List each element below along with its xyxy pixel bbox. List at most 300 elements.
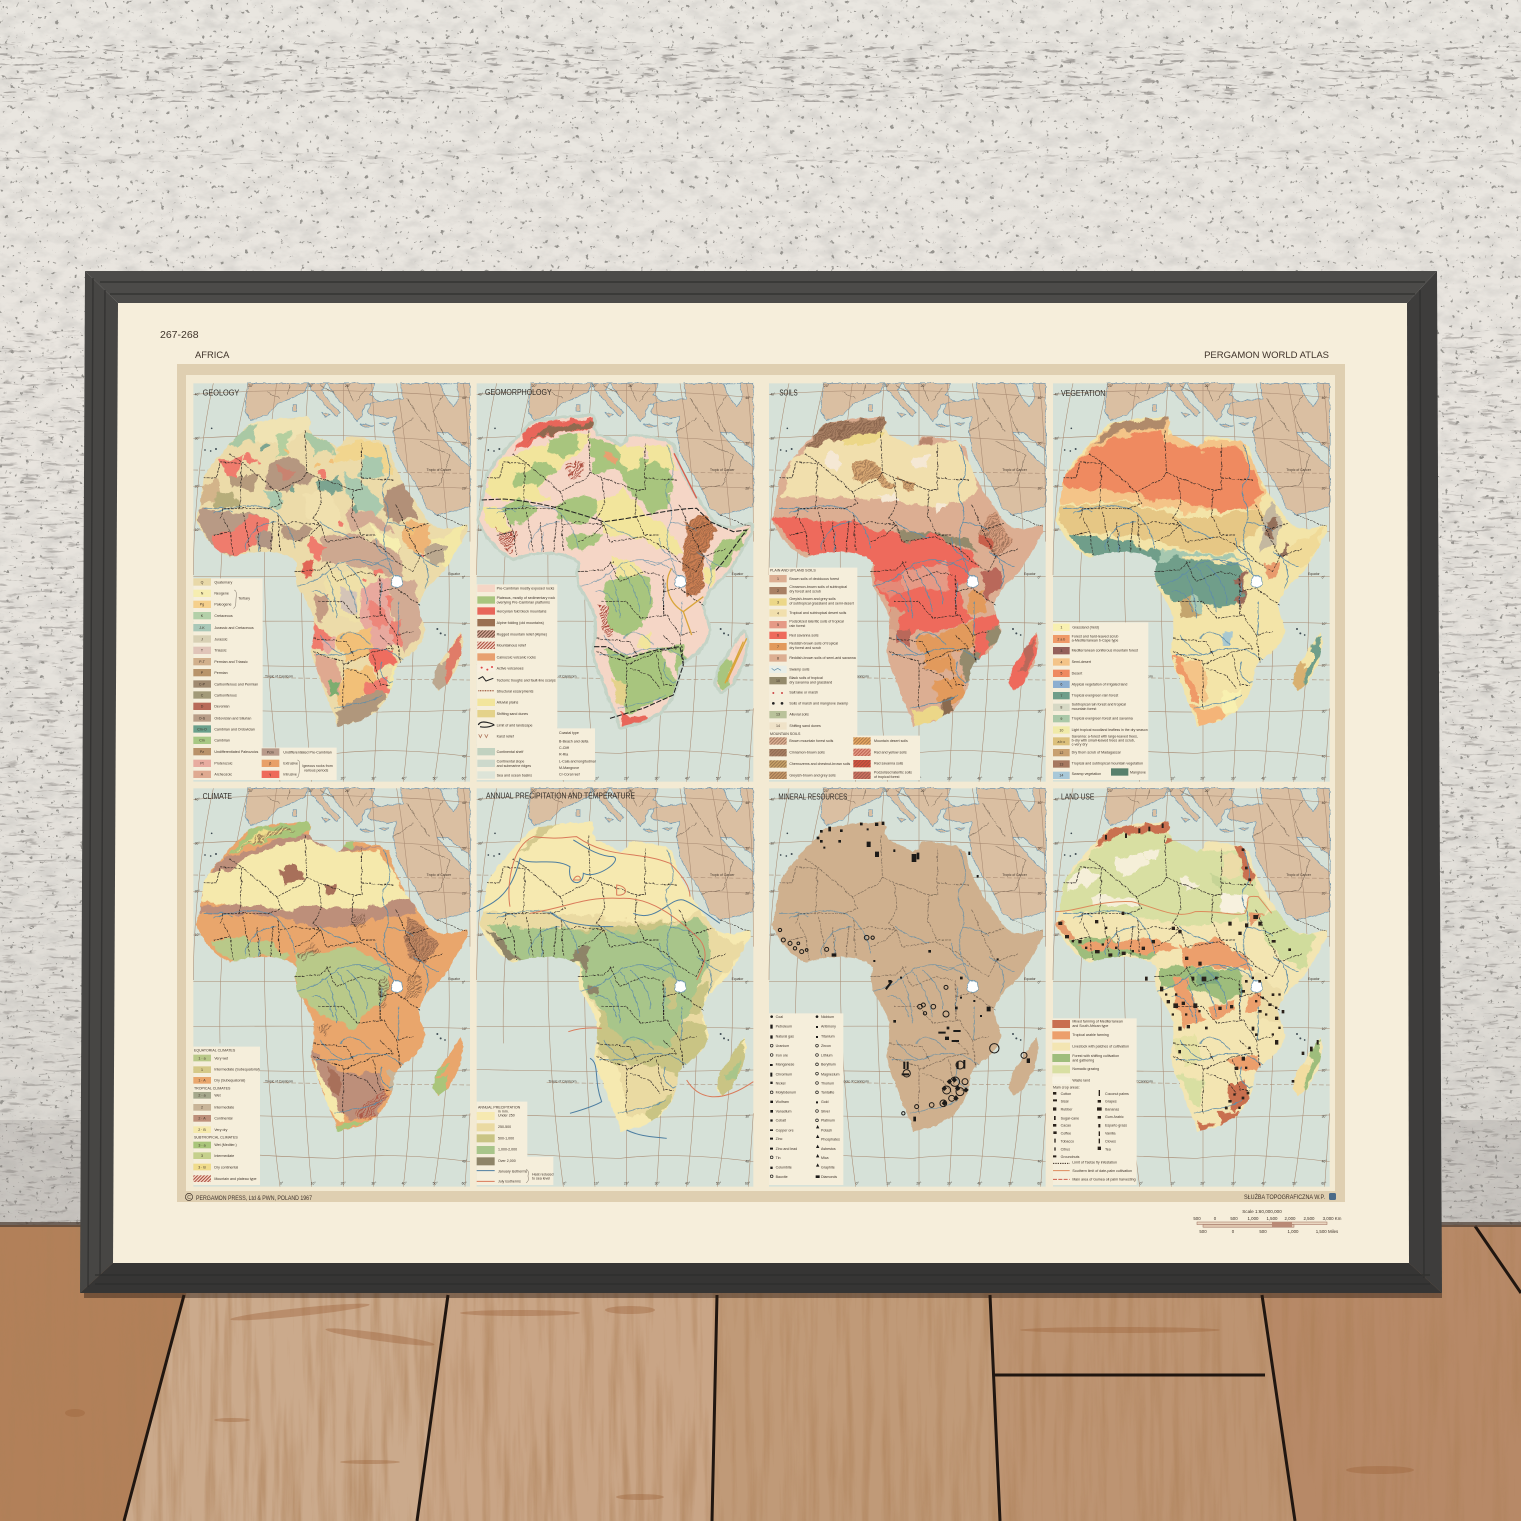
legend: vegetation: a b c	[1057, 740, 1065, 744]
legend: soils: Black soils of tropical	[789, 676, 823, 680]
scale bar: 500	[1199, 1229, 1207, 1234]
Africa soil regions	[772, 416, 1044, 727]
legend: soils: Red savanna soils	[874, 761, 903, 765]
legend: geology: D	[201, 705, 204, 709]
legend: vegetation: 5	[1060, 672, 1062, 676]
legend: geomorphology: Rugged mountain relief (Alpine)	[497, 632, 547, 636]
legend: climate: 1 · A	[198, 1079, 206, 1083]
map sheet: paper	[186, 375, 1335, 1191]
legend: climate	[193, 1047, 260, 1185]
legend: soils: 4	[777, 611, 779, 615]
legend: land use: Gum Arabic	[1105, 1115, 1124, 1119]
legend: vegetation	[1053, 622, 1148, 780]
legend: geology: Igneous rocks from	[302, 764, 333, 768]
legend: mineral resources: Vanadium	[776, 1109, 792, 1113]
legend: soils: dry forest and scrub	[789, 646, 821, 650]
legend: annual precipitation: Under 250	[498, 1114, 515, 1118]
legend: mineral resources: Zinc and lead	[776, 1147, 797, 1151]
legend: geomorphology: Hercynian fold block mountains	[497, 609, 547, 613]
scale bar: 500	[1230, 1216, 1238, 1221]
legend: soils: 3	[777, 600, 779, 604]
legend: vegetation: Light tropical woodland leafless in the dry season	[1072, 728, 1148, 732]
legend: geomorphology: L-Cala and longitudinal	[559, 759, 596, 763]
legend: soils: dry savanna and grassland	[789, 681, 832, 685]
legend: land use: Cloves	[1105, 1140, 1116, 1144]
legend: soils: 6	[777, 634, 779, 638]
heading: Africa: AFRICA	[195, 349, 230, 360]
legend: land use: Tropical arable farming	[1072, 1033, 1109, 1037]
legend: mineral resources: Nickel	[776, 1081, 786, 1085]
legend: soils: Cinnamon-brown soils	[789, 750, 825, 754]
legend: mineral resources: Manganese	[776, 1063, 794, 1067]
legend: soils: dry forest and scrub	[789, 590, 821, 594]
legend: annual precipitation	[477, 1102, 553, 1185]
legend: geology: T	[201, 649, 204, 653]
legend: geology: Pz	[200, 750, 204, 754]
legend: land use: Sisal	[1061, 1100, 1069, 1104]
legend: land use	[1052, 1018, 1137, 1185]
continental shelf shading	[479, 416, 751, 727]
scale bar: 1,000	[1288, 1229, 1299, 1234]
scale bar: 0	[1232, 1229, 1235, 1234]
legend: geomorphology: Active volcanoes	[497, 666, 524, 670]
scale bar: 500	[1193, 1216, 1201, 1221]
legend: geology: J	[201, 637, 203, 641]
legend: land use: Forest with shifting cultivation	[1072, 1054, 1119, 1058]
legend: land use: Cacao	[1061, 1124, 1071, 1128]
legend: mineral resources: Silver	[821, 1109, 831, 1113]
legend: geomorphology: M-Mangrove	[559, 766, 579, 770]
legend: annual precipitation: in mm.	[498, 1109, 509, 1113]
legend: mineral resources: Thorium	[821, 1081, 834, 1085]
legend: geology: Cambrian	[214, 739, 230, 743]
legend: geology: Pcm	[267, 750, 274, 754]
legend: climate: 1 · a	[198, 1056, 206, 1060]
Africa land-use regions	[1056, 821, 1328, 1132]
panel title: CLIMATE	[203, 792, 232, 801]
legend: geomorphology: Tectonic troughs and fault-line scarps	[497, 678, 556, 682]
legend: mineral resources: Zircon	[821, 1044, 831, 1048]
legend: vegetation: 2 a b	[1057, 638, 1065, 642]
legend: geology: C	[201, 693, 204, 697]
legend: climate: Wet (Mediter.)	[214, 1143, 237, 1147]
legend: climate: Mountain and plateau type	[214, 1177, 257, 1181]
legend: vegetation: Tropical and subtropical mountain vegetation	[1072, 762, 1143, 766]
legend: soils: 8	[777, 656, 779, 660]
wooden floor	[0, 1222, 1521, 1521]
legend: vegetation: b-dry with small-leaved trees and scrub,	[1072, 738, 1135, 742]
legend: climate: 2 · a	[198, 1094, 206, 1098]
date-palm limit line	[1055, 896, 1272, 914]
legend: climate: Intermediate	[214, 1154, 234, 1158]
map panel: geomorphology	[470, 383, 760, 782]
legend: soils: 13	[776, 713, 780, 717]
crop symbols	[1058, 823, 1319, 1109]
legend: land use: Main area of Guinea oil palm harvesting	[1072, 1178, 1136, 1182]
legend: vegetation: 9	[1060, 717, 1062, 721]
legend: land use: Rubber	[1061, 1107, 1073, 1111]
legend: soils: Cinnamon-brown soils of subtropical	[789, 585, 847, 589]
legend: geomorphology: Coastal type	[559, 731, 579, 735]
map panel: soils	[760, 383, 1050, 782]
legend: climate: Dry continental	[214, 1165, 238, 1169]
legend: land use: Waste land	[1072, 1078, 1090, 1082]
legend: vegetation: Desert	[1072, 671, 1082, 675]
legend: land use: Groundnuts	[1061, 1155, 1080, 1159]
legend: geology: N	[201, 592, 204, 596]
legend: soils: Red and yellow soils	[874, 750, 907, 754]
legend: soils: Alluvial soils	[789, 713, 809, 717]
legend: soils: 7	[777, 645, 779, 649]
legend: mineral resources: Natural gas	[776, 1035, 794, 1039]
legend: soils: 10	[776, 679, 780, 683]
legend: mineral resources: Cobalt	[776, 1119, 786, 1123]
legend: soils: Greyish-brown and grey soils	[789, 597, 836, 601]
legend: land use: Main crop areas:	[1053, 1086, 1080, 1090]
map panel: vegetation	[1045, 383, 1335, 782]
legend: vegetation: Savanna: a-forest with large-leaved trees,	[1072, 734, 1138, 738]
legend: land use: Limit of Tsetse fly infestation	[1072, 1160, 1117, 1164]
legend: soils: rain forest	[789, 624, 805, 628]
legend: land use: Mixed farming of Mediterranean	[1072, 1019, 1123, 1023]
picture frame	[80, 271, 1442, 1293]
legend: vegetation: 8	[1060, 706, 1062, 710]
legend: mineral resources: Magnesium	[821, 1072, 840, 1076]
legend: climate: 3 · a	[198, 1143, 206, 1147]
legend: geology: O-S	[199, 716, 206, 720]
legend: vegetation: Mangrove	[1130, 771, 1146, 775]
legend: land use: Sugar-cane	[1061, 1116, 1079, 1120]
legend: vegetation: 10	[1059, 728, 1063, 732]
legend: mineral resources: Platinum	[821, 1119, 835, 1123]
legend: mineral resources: Niobium	[821, 1015, 834, 1019]
legend: geomorphology: and submarine ridges	[497, 764, 531, 768]
copyright line: PERGAMON PRESS, Ltd & PWN, POLAND 1967	[196, 1195, 312, 1202]
legend: geomorphology: Shifting sand dunes	[497, 712, 528, 716]
legend: vegetation: 3	[1060, 649, 1062, 653]
legend: mineral resources: Petroleum	[776, 1025, 792, 1029]
legend: land use: Coffee	[1061, 1131, 1071, 1135]
legend: soils: MOUNTAIN SOILS	[770, 732, 801, 736]
legend: geology: A	[201, 773, 204, 777]
legend: vegetation: Grassland (Veld)	[1072, 626, 1099, 630]
legend: vegetation: a-Mediterranean b-Cape type	[1072, 639, 1118, 643]
scale bar: 500	[1259, 1229, 1267, 1234]
map panel: mineral resources	[760, 788, 1050, 1187]
panel title: GEOMORPHOLOGY	[485, 388, 552, 397]
Africa precipitation regions	[479, 821, 751, 1132]
legend: land use: Coconut palms	[1105, 1092, 1129, 1096]
legend: climate: 2 · B	[198, 1128, 206, 1132]
legend: climate: 2	[201, 1106, 203, 1110]
legend: geology: Proterozoic	[214, 762, 233, 766]
legend: geology: Undifferentiated Pre-Cambrian	[283, 750, 332, 754]
page number: 267-268	[160, 329, 199, 341]
legend: vegetation: Atypical vegetation of irrigated land	[1072, 682, 1127, 686]
legend: geology: Quaternary	[214, 580, 232, 584]
legend: soils: Podzolized lateritic soils of tropical	[789, 619, 844, 623]
legend: land use: Nomadic grazing	[1072, 1067, 1099, 1071]
legend: soils: Red savanna soils	[789, 634, 819, 638]
scale bar: 1,000	[1248, 1216, 1259, 1221]
legend: annual precipitation: Over 2,000	[498, 1159, 516, 1163]
legend: mineral resources: Phosphates	[821, 1138, 840, 1142]
legend: geomorphology: Plateaus, mostly of sedimentary rock	[497, 596, 555, 600]
legend: geomorphology: B-Beach and delta	[559, 739, 588, 743]
legend: geology: γ	[269, 773, 271, 777]
legend: geology: Ordovician and Silurian	[214, 716, 251, 720]
legend: geology: Tertiary	[238, 597, 250, 601]
legend: mineral resources: Gold	[821, 1100, 829, 1104]
legend: mineral resources: Coal	[776, 1015, 783, 1019]
scale bar	[1193, 1209, 1342, 1234]
scale bar: Scale 1:60,000,000	[1242, 1209, 1282, 1214]
legend: soils: of tropical forest	[874, 775, 899, 779]
legend: geology: Neogene	[214, 592, 229, 596]
legend: mineral resources: Titanium	[821, 1035, 835, 1039]
legend: climate: 2 · A	[198, 1117, 206, 1121]
legend: geology: Pg	[200, 603, 204, 607]
legend: geomorphology: Structural escarpments	[497, 689, 534, 693]
legend: climate: Dry (Subequatorial)	[214, 1079, 245, 1083]
map sheet: tan border	[177, 364, 1345, 1202]
legend: geomorphology: Alpine folding (old mountains)	[497, 621, 544, 625]
legend: geology: Carboniferous	[214, 693, 237, 697]
legend: climate: TROPICAL CLIMATES	[194, 1086, 231, 1090]
legend: mineral resources: Lithium	[821, 1053, 833, 1057]
legend: climate: EQUATORIAL CLIMATES	[194, 1049, 236, 1053]
legend: soils: Shifting sand dunes	[789, 724, 821, 728]
legend: climate: Intermediate	[214, 1106, 234, 1110]
legend: mineral resources	[769, 1013, 843, 1185]
mineral deposit symbols	[778, 822, 1030, 1121]
legend: mineral resources: Wolfram	[776, 1100, 789, 1104]
legend: land use: Tea	[1105, 1148, 1111, 1152]
legend: geomorphology: Karst relief	[497, 734, 514, 738]
legend: mineral resources: Uranium	[776, 1044, 789, 1048]
legend: soils: Tropical and subtropical desert soils	[789, 611, 846, 615]
legend: geology: β	[269, 762, 271, 766]
isotherms: July	[509, 837, 753, 1097]
legend: geology: Cambrian and Ordovician	[214, 727, 255, 731]
legend: vegetation: Subtropical rain forest and tropical	[1072, 702, 1126, 706]
legend: soils: PLAIN AND UPLAND SOILS	[770, 569, 816, 573]
legend: geology: Permian	[214, 671, 228, 675]
legend: soils: Reddish-brown soils of semi-arid savanna	[789, 656, 856, 660]
legend: land use: Esparto grass	[1105, 1124, 1127, 1128]
legend: geology: Jurassic	[214, 637, 228, 641]
scale bar: 1,500 Miles	[1316, 1229, 1339, 1234]
legend: geomorphology: Mountainous relief	[497, 644, 526, 648]
legend: soils: Soils of marsh and mangrove swamp	[789, 701, 848, 705]
legend: geomorphology: Alluvial plains	[497, 701, 519, 705]
legend: land use: Vanilla	[1105, 1131, 1115, 1135]
isotherms: January	[477, 840, 720, 1138]
legend: geology: J-K	[199, 626, 205, 630]
legend: geology: P-T	[199, 660, 206, 664]
panel title: LAND USE	[1061, 793, 1094, 802]
legend: mineral resources: Diamonds	[821, 1175, 837, 1179]
legend: land use: Cotton	[1061, 1092, 1071, 1096]
legend: mineral resources: Asbestos	[821, 1147, 836, 1151]
legend: mineral resources: Columbite	[776, 1166, 792, 1170]
legend: geology: Cm	[199, 739, 205, 743]
panel title: VEGETATION	[1061, 389, 1106, 398]
legend: soils: Greyish-brown and grey soils	[789, 773, 836, 777]
legend: geology: C-P	[199, 682, 206, 686]
legend: mineral resources: Copper ore	[776, 1128, 794, 1132]
legend: vegetation: 12	[1059, 751, 1063, 755]
legend: climate: Wet	[214, 1094, 221, 1098]
legend: geology: Undifferentiated Paleozoics	[214, 750, 259, 754]
legend: land use: Grapes	[1105, 1100, 1117, 1104]
legend: geology	[193, 578, 337, 780]
panel title: GEOLOGY	[203, 388, 240, 397]
legend: geomorphology: overlying Pre-Cambrian platforms	[497, 600, 550, 604]
legend: soils: Swamp soils	[789, 667, 810, 671]
panel title: MINERAL RESOURCES	[778, 793, 847, 802]
legend: land use: Citrus	[1061, 1148, 1070, 1152]
legend: annual precipitation: to sea level	[532, 1177, 550, 1181]
legend: mineral resources: Molybdenum	[776, 1091, 796, 1095]
map panel: climate	[187, 788, 477, 1187]
legend: soils: 14	[776, 724, 780, 728]
legend: annual precipitation: Heat reduced	[532, 1172, 553, 1176]
legend: climate: 3 · B	[198, 1165, 206, 1169]
legend: geology: K	[201, 614, 204, 618]
legend: mineral resources: Beryllium	[821, 1063, 836, 1067]
scale bar: 0	[1214, 1216, 1217, 1221]
legend: geology: Permian and Triassic	[214, 660, 248, 664]
legend: annual precipitation: 1,000-2,000	[498, 1148, 517, 1152]
heading: atlas name: PERGAMON WORLD ATLAS	[1204, 350, 1329, 361]
legend: soils: Chernozems and chestnut-brown soils	[789, 762, 850, 766]
legend: soils: Brown mountain forest soils	[789, 739, 833, 743]
legend: mineral resources: Bauxite	[776, 1175, 788, 1179]
legend: vegetation: Dry thorn scrub of Madagascar	[1072, 751, 1122, 755]
legend: climate: 3	[201, 1154, 203, 1158]
legend: land use: Bananas	[1105, 1107, 1119, 1111]
publisher credit: SŁUŻBA TOPOGRAFICZNA W.P.	[1244, 1192, 1325, 1201]
legend: vegetation: 1	[1060, 626, 1062, 630]
legend: mineral resources: Zinc	[776, 1137, 783, 1141]
scale bar: 2,500	[1304, 1216, 1315, 1221]
legend: vegetation: 7	[1060, 694, 1062, 698]
legend: climate: Continental	[214, 1117, 233, 1121]
legend: soils: Brown soils of deciduous forest	[789, 577, 839, 581]
map panel: geology	[187, 383, 477, 782]
legend: mineral resources: Antimony	[821, 1025, 836, 1029]
legend: annual precipitation: July isotherms	[498, 1180, 521, 1184]
copyright line	[185, 1193, 312, 1202]
panel title: SOILS	[779, 388, 798, 397]
legend: geology: various periods	[304, 769, 328, 773]
legend: soils: Podzolized lateritic soils	[874, 770, 912, 774]
legend: soils: 2	[777, 589, 779, 593]
legend: land use: and South African type	[1072, 1024, 1108, 1028]
legend: geology: Paleogene	[214, 603, 231, 607]
legend: soils: Reddish-brown soils of tropical	[789, 641, 838, 645]
legend: climate: Intermediate (Subequatorial)	[214, 1068, 260, 1072]
Africa land fill	[772, 821, 1044, 1132]
legend: land use: Southern limit of date-palm cultivation	[1072, 1169, 1132, 1173]
legend: geology: Archeozoic	[214, 773, 232, 777]
legend: vegetation: Forest and hard-leaved scrub	[1072, 634, 1118, 638]
legend: vegetation: 6	[1060, 683, 1062, 687]
map panel: annual precipitation and temperature	[470, 788, 760, 1187]
legend: geology: Q	[201, 580, 204, 584]
legend: mineral resources: Tantalite	[821, 1091, 834, 1095]
legend: geomorphology: Sea and ocean basins	[497, 773, 532, 777]
legend: geology: Pt	[200, 762, 204, 766]
legend: climate: SUBTROPICAL CLIMATES	[194, 1136, 238, 1140]
legend: climate: 1	[201, 1068, 203, 1072]
legend: geology: Carboniferous and Permian	[214, 682, 258, 686]
legend: geomorphology: R-Ria	[559, 752, 568, 756]
legend: mineral resources: Chromium	[776, 1072, 792, 1076]
legend: climate: Very wet	[214, 1056, 228, 1060]
legend: geomorphology	[477, 584, 596, 780]
legend: vegetation: 13	[1059, 762, 1063, 766]
Africa geomorphology regions	[479, 416, 751, 727]
legend: soils: Mountain desert soils	[874, 739, 908, 743]
scale bar: 1,500	[1266, 1216, 1278, 1221]
legend: soils: of subtropical grassland and semi-desert	[789, 602, 854, 606]
legend: mineral resources: Graphite	[821, 1166, 835, 1170]
legend: annual precipitation: 250-500	[498, 1125, 511, 1129]
rift valley scarps	[667, 568, 747, 683]
legend: annual precipitation: 500-1,000	[498, 1136, 514, 1140]
panel title: ANNUAL PRECIPITATION AND TEMPERATURE	[486, 792, 635, 801]
legend: geology: Cm-O	[197, 727, 207, 731]
Africa climate regions	[196, 821, 468, 1132]
legend: vegetation: 14	[1059, 774, 1063, 778]
legend: land use: and gathering	[1072, 1058, 1094, 1062]
legend: mineral resources: Potash	[821, 1128, 832, 1132]
legend: geomorphology: Continental shelf	[497, 750, 523, 754]
scale bar: 3,000 Km	[1323, 1216, 1342, 1221]
legend: vegetation: 4	[1060, 660, 1062, 664]
legend: mineral resources: Mica	[821, 1156, 829, 1160]
legend: vegetation: Swamp vegetation	[1072, 772, 1101, 776]
legend: annual precipitation: January isotherms	[498, 1169, 527, 1173]
legend: geomorphology: Pre-Cambrian mostly exposed rocks	[497, 587, 555, 591]
legend: land use: Livestock with patches of cultivation	[1072, 1044, 1129, 1048]
legend: geomorphology: Limit of arid landscape	[497, 723, 532, 727]
legend: soils: Salt lake or marsh	[789, 690, 818, 694]
legend: geology: Intrusive	[283, 773, 297, 777]
legend: vegetation: Mediterranean coniferous mountain forest	[1072, 649, 1138, 653]
legend: geomorphology: Continental slope	[497, 759, 524, 763]
legend: soils	[769, 568, 920, 780]
legend: geomorphology: Cainozoic volcanic rocks	[497, 655, 536, 659]
legend: geology: Triassic	[214, 649, 227, 653]
legend: geology: Jurassic and Cretaceous	[214, 626, 254, 630]
legend: vegetation: c-very dry	[1072, 742, 1088, 746]
legend: mineral resources: Tin	[776, 1156, 781, 1160]
legend: vegetation: Semi-desert	[1072, 660, 1091, 664]
legend: vegetation: Tropical evergreen rain forest	[1072, 694, 1118, 698]
legend: annual precipitation: ANNUAL PRECIPITATION	[478, 1105, 521, 1109]
legend: vegetation: mountain forest	[1072, 707, 1096, 711]
limit of arid landscape line	[482, 499, 747, 718]
legend: mineral resources: Iron ore	[776, 1053, 788, 1057]
legend: geology: Extrusive	[283, 762, 298, 766]
Africa vegetation regions	[1056, 416, 1328, 727]
legend: soils: 5	[777, 623, 779, 627]
map panel: land use	[1045, 788, 1335, 1187]
copyright line: C	[187, 1195, 191, 1201]
